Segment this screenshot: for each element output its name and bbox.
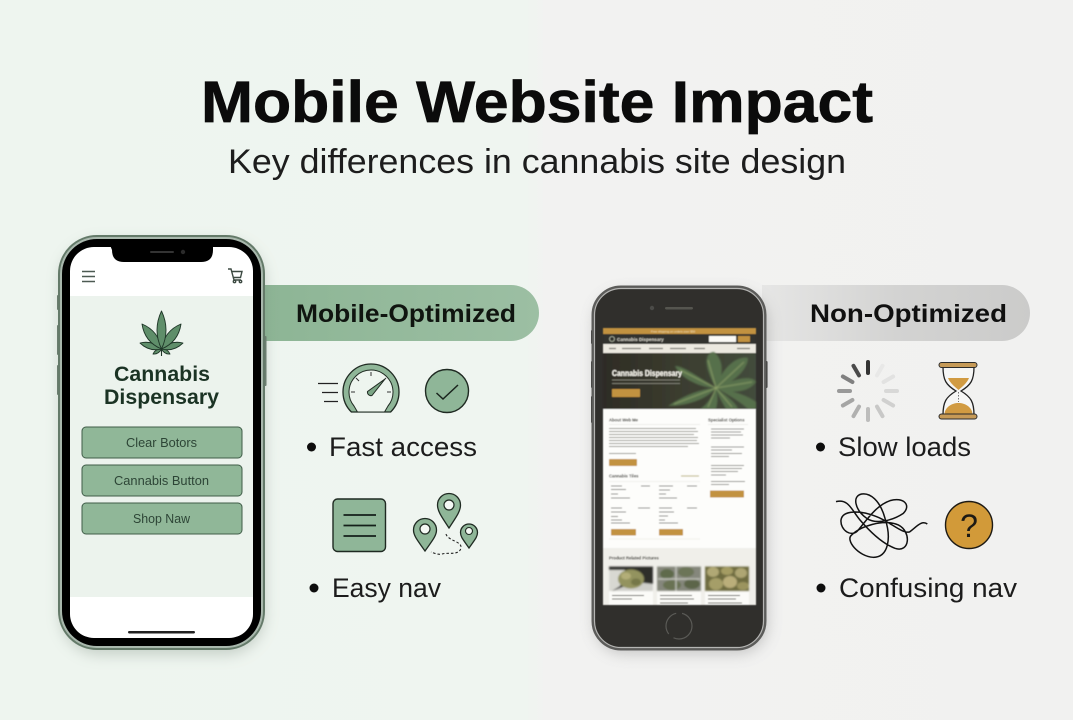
button: Clear Botors [82,427,242,458]
sidebar options [708,418,748,498]
about section: About Web Me [609,418,639,422]
icon: check circle [426,370,468,412]
home indicator [128,631,195,634]
product photo 2 [657,566,701,591]
speaker and camera [150,250,185,254]
about section [609,418,700,466]
icon: loading spinner [839,362,897,420]
desktop site squeezed into the screen [603,328,756,605]
white content panel [603,409,756,605]
related pictures section: Product Related Pictures [609,556,659,560]
related pictures section [603,548,756,605]
icon: question mark circle: ? [960,508,978,544]
optimized phone mockup [57,236,266,655]
hero banner: Cannabis Dispensary [612,369,682,378]
cannabis tiles products: Cannabis Tiles [609,474,639,478]
icon: speedometer with motion lines [318,364,399,412]
icon: hourglass [939,362,977,419]
subtitle: Key differences in cannabis site design [228,143,846,181]
site header: Cannabis Dispensary [617,337,664,342]
non-optimized phone mockup [591,287,768,654]
hero banner [603,352,756,409]
button: Shop Naw: Shop Naw [133,511,191,526]
label pill: mobile-optimized: Mobile-Optimized [296,300,516,328]
phone heading: Cannabis Dispensary [104,363,219,409]
drawback: Confusing nav: Confusing nav [839,573,1018,603]
button: Shop Naw [82,503,242,534]
button: Cannabis Button: Cannabis Button [114,473,209,488]
label pill: non-optimized: Non-Optimized [810,300,1007,328]
promo bar [603,328,756,334]
icon: menu list square [333,499,386,552]
camera and speaker [650,306,693,310]
product photo 3 [705,566,749,591]
benefit: Fast access: Fast access [329,432,477,462]
icon: map pins with dashed route [414,494,478,554]
nav bar [603,344,756,353]
home button [666,613,692,639]
benefit: Slow loads: Slow loads [838,432,971,462]
phone screen: mint content area [70,296,253,597]
phone heading: Cannabis Dispensary: Dispensary [104,386,219,409]
product photo 1 [609,566,653,591]
phone notch [110,245,213,262]
label pill: non-optimized [762,285,1030,341]
phone heading: Cannabis Dispensary: Cannabis [114,363,210,386]
icon: question mark circle [946,502,992,548]
icon: hamburger menu [82,272,95,282]
cannabis tiles products [609,474,700,539]
sidebar options: Specialist Options [708,418,745,422]
icon: tangled line [836,494,927,557]
benefit: Easy nav: Easy nav [332,573,441,603]
title: Mobile Website Impact [201,70,873,135]
icon: cart [228,269,242,283]
promo bar: Free shipping on orders over $50 [651,330,696,334]
icon: cannabis leaf [140,311,183,356]
button: Clear Botors: Clear Botors [126,435,197,450]
label pill: mobile-optimized [262,285,539,341]
button: Cannabis Button [82,465,242,496]
site header [603,334,756,344]
